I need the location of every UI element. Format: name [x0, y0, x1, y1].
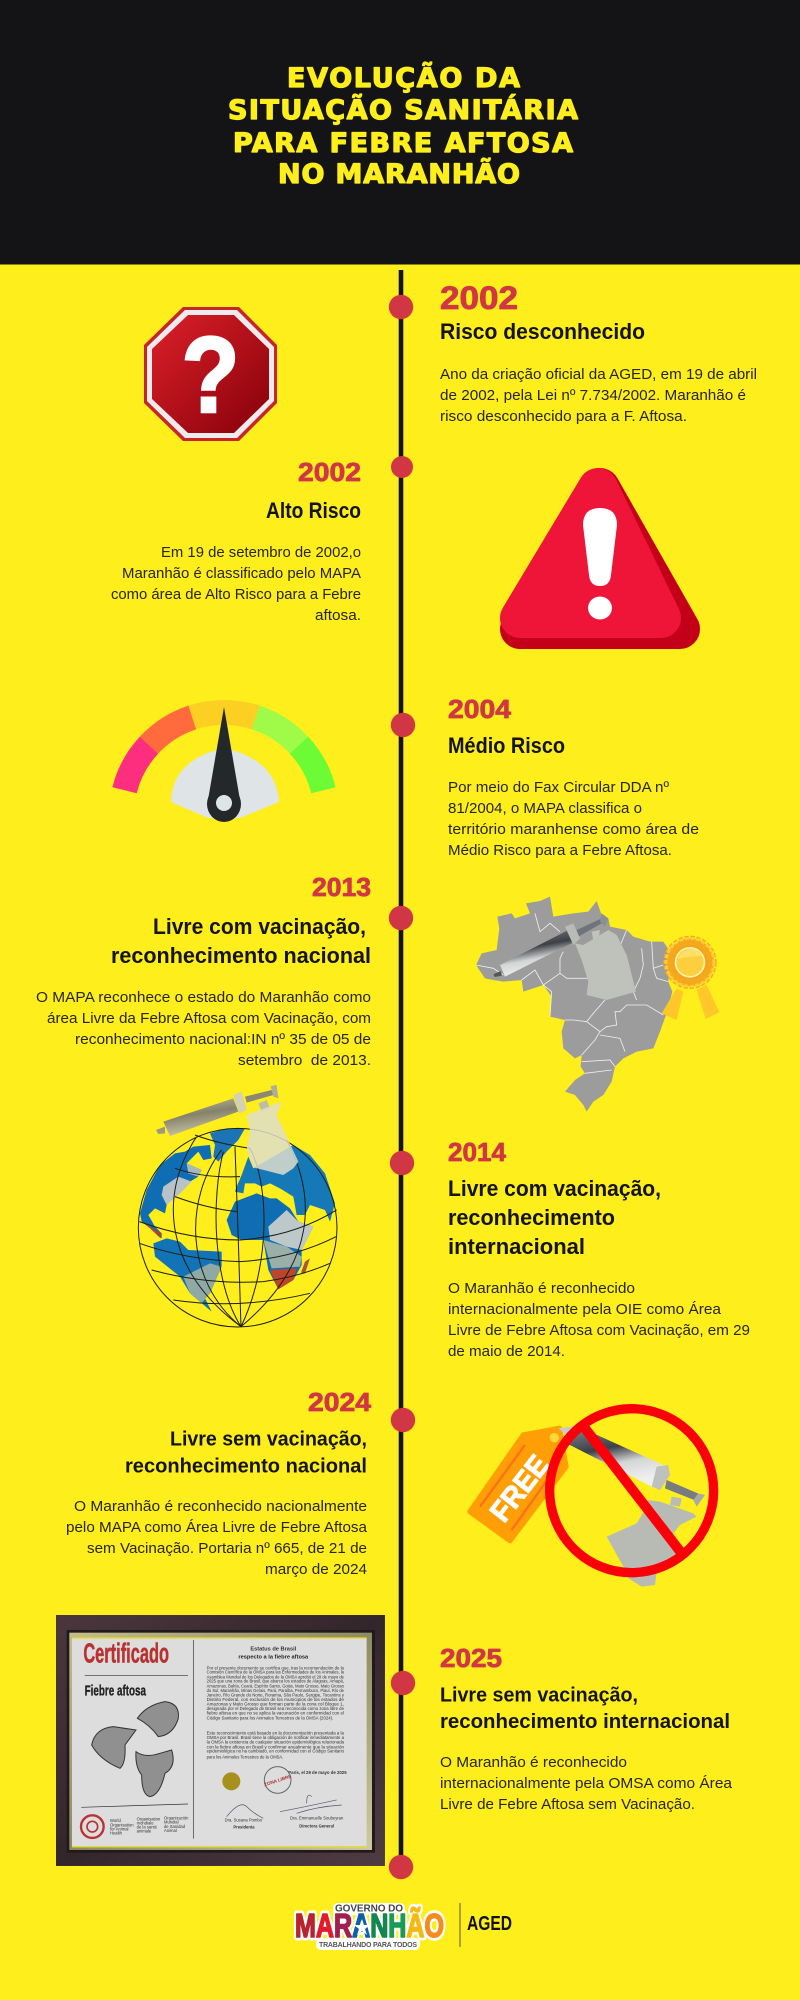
logo: Governo do Maranhão: MARANHÃO — [295, 1907, 444, 1944]
certificate body text: epidemiológica no ha cambiado, en conformidad con el Código Sanitario — [207, 1749, 345, 1754]
syringe — [156, 1085, 298, 1175]
heading: Livre sem vacinação, — [440, 1684, 638, 1706]
certificate body text: OMSA por Brasil. Brasil tiene la obligación de notificar inmediatamente a — [207, 1735, 345, 1740]
certificate body text: París, el 29 de mayo de 2025 — [288, 1770, 347, 1775]
body text: como área de Alto Risco para a Febre — [111, 586, 361, 603]
entry: 2004 medio risco — [448, 694, 699, 859]
certificate image: World — [110, 1818, 121, 1823]
heading: Médio Risco — [448, 733, 565, 758]
certificate image: animale — [137, 1829, 152, 1834]
heading — [125, 1428, 367, 1478]
certificate body text: do Sul, Maranhão, Minas Gerais, Pará, Paraíba, Pernambuco, Piauí, Río de — [207, 1688, 345, 1693]
body text: território maranhense como área de — [448, 821, 699, 838]
certificate body text: designada por el Delegado de Brasil sea reconocida como zona libre de — [207, 1706, 345, 1711]
title: NO MARANHÃO — [278, 158, 520, 190]
certificate image: Presidenta — [233, 1825, 255, 1830]
year: 2025 — [440, 1643, 502, 1673]
certificate image: Organización — [164, 1815, 189, 1820]
body text — [111, 544, 361, 624]
heading: Livre sem vacinação, — [170, 1428, 367, 1450]
icon: stop sign with question mark: ? — [182, 314, 240, 435]
body text: pelo MAPA como Área Livre de Febre Aftosa — [66, 1519, 368, 1536]
certificate body text: Por el presente documento se certifica que, tras la recomendación de la — [207, 1665, 345, 1670]
certificate image: respecto a la fiebre aftosa — [238, 1655, 309, 1661]
syringe — [493, 913, 636, 1000]
certificate image: Mundial — [164, 1820, 179, 1825]
heading — [111, 914, 371, 968]
certificate image: Dra. Susana Pombo — [225, 1817, 263, 1822]
certificate body text: Comisión Científica de la OMSA para las Enfermedades de los Animales, la — [207, 1670, 345, 1675]
body text — [448, 779, 699, 859]
body text: Maranhão é classificado pelo MAPA — [122, 565, 361, 582]
body text: Por meio do Fax Circular DDA nº — [448, 779, 670, 796]
certificate image: Health — [110, 1830, 123, 1835]
certificate image: Fiebre aftosa — [85, 1683, 146, 1700]
entry: 2013 reconhecimento nacional — [36, 872, 371, 1069]
body text: de 2002, pela Lei nº 7.734/2002. Maranhão é — [440, 387, 746, 404]
certificate image: ZONA LIBRE — [264, 1774, 292, 1787]
certificate body text: Amazonas, Bahía, Ceará, Espírito Santo, Goiás, Mato Grosso, Mato Grosso — [207, 1683, 345, 1688]
heading: Livre com vacinação, — [448, 1176, 661, 1201]
heading: Alto Risco — [266, 498, 361, 523]
body text: de maio de 2014. — [448, 1343, 565, 1360]
title: SITUAÇÃO SANITÁRIA — [228, 94, 578, 126]
certificate image: Directora General — [299, 1823, 334, 1828]
logo: AGED: AGED — [467, 1913, 512, 1935]
certificate body text: fiebre aftosa en que no se aplica la vacunación en conformidad con el — [207, 1711, 344, 1716]
body text: sem Vacinação. Portaria nº 665, de 21 de — [87, 1540, 367, 1557]
certificate image: mondiale — [137, 1821, 154, 1826]
entry: 2002 risco desconhecido — [440, 280, 757, 425]
logo: Governo do Maranhão: TRABALHANDO PARA TODOS — [319, 1942, 417, 1949]
timeline markers — [389, 295, 415, 1879]
icon: free tag — [470, 1428, 566, 1541]
body text: Ano da criação oficial da AGED, em 19 de abril — [440, 366, 757, 383]
logo: Governo do Maranhão: MARANHÃO — [295, 1907, 444, 1944]
certificate body text: Código Sanitario para los Animales Terrestres de la OMSA (2024). — [207, 1715, 333, 1720]
icon: free tag: FREE — [484, 1449, 556, 1528]
certificate image: de Sanidad — [164, 1824, 186, 1829]
certificate body text: Asamblea Mundial de los Delegados de la OMSA aprobó el 29 de mayo de — [207, 1674, 345, 1679]
body text: Em 19 de setembro de 2002,o — [161, 544, 361, 561]
heading — [440, 1684, 730, 1733]
certificate image: Certificado — [83, 1638, 169, 1669]
continents — [140, 1128, 335, 1312]
icon: risk gauge — [112, 700, 336, 822]
certificate body text: la OMSA la existencia de cualquier situación epidemiológica relacionada — [207, 1740, 345, 1745]
body text: O MAPA reconhece o estado do Maranhão como — [36, 989, 371, 1006]
logo divider — [459, 1903, 461, 1947]
heading: reconhecimento nacional — [111, 943, 371, 968]
heading: Livre com vacinação, — [153, 914, 366, 939]
icon: crossed out syringe — [550, 1409, 714, 1587]
certificate body text: Este reconocimiento está basado en la documentación presentada a la — [207, 1730, 345, 1735]
icon: stop sign with question mark — [144, 307, 277, 441]
year: 2004 — [448, 694, 512, 724]
title: EVOLUÇÃO DA — [287, 62, 520, 94]
body text: O Maranhão é reconhecido — [440, 1754, 627, 1771]
body text — [66, 1498, 368, 1578]
body text — [36, 989, 371, 1069]
heading: reconhecimento — [448, 1205, 615, 1230]
icon: Brazil map with syringe — [476, 897, 672, 1112]
body text: risco desconhecido para a F. Aftosa. — [440, 408, 687, 425]
body text: setembro de 2013. — [238, 1052, 371, 1069]
icon: gold medal — [662, 938, 719, 1020]
entry: 2002 alto risco — [111, 457, 361, 624]
certificate image: Estatus de Brasil — [250, 1647, 297, 1653]
body text — [440, 1754, 733, 1813]
icon: warning triangle — [520, 488, 680, 629]
certificate body text: Distrito Federal, con exclusión de los municipios de los estados de — [207, 1697, 345, 1702]
certificate image — [56, 1615, 385, 1866]
certificate body text: Amazonas y Mato Grosso que forman parte de la zona col Bloque 1, — [207, 1702, 344, 1707]
body text: março de 2024 — [265, 1561, 367, 1578]
body text: internacionalmente pela OMSA como Área — [440, 1775, 733, 1792]
body text: O Maranhão é reconhecido — [448, 1280, 635, 1297]
year: 2014 — [448, 1137, 507, 1167]
title — [228, 62, 578, 190]
body text: Livre de Febre Aftosa sem Vacinação. — [440, 1796, 695, 1813]
certificate body text: con la fiebre aftosa en Brasil y confirmar anualmente que la situación — [207, 1744, 345, 1749]
grid — [138, 1128, 337, 1327]
certificate image: for Animal — [110, 1826, 129, 1831]
certificate image: Animal — [164, 1828, 177, 1833]
timeline axis — [399, 270, 403, 1867]
year: 2013 — [312, 872, 371, 902]
certificate image: Organisation — [137, 1816, 161, 1821]
entry: 2025 sem vacinacao internacional — [440, 1643, 733, 1813]
body text: internacionalmente pela OIE como Área — [448, 1301, 722, 1318]
animal sketches — [92, 1702, 178, 1797]
body text — [440, 366, 757, 425]
body text: 81/2004, o MAPA classifica o — [448, 800, 642, 817]
certificate body text: para los Animales Terrestres de la OMSA. — [207, 1754, 283, 1759]
title: PARA FEBRE AFTOSA — [233, 128, 573, 159]
certificate body text — [207, 1665, 347, 1775]
certificate image: Organisation — [110, 1822, 134, 1827]
body text: área Livre da Febre Aftosa com Vacinação, com — [47, 1010, 371, 1027]
year: 2024 — [308, 1387, 372, 1417]
certificate image: Dra. Emmanuelle Soubeyran — [290, 1815, 344, 1820]
body text: reconhecimento nacional:IN nº 35 de 05 de — [75, 1031, 371, 1048]
body text — [448, 1280, 750, 1360]
syringe — [558, 1425, 705, 1587]
heading: Risco desconhecido — [440, 319, 645, 344]
certificate body text: Janeiro, Río Grande do Norte, Roraima, São Paulo, Sergipe, Tocantins y — [207, 1693, 345, 1698]
entry: 2024 sem vacinacao nacional — [66, 1387, 372, 1578]
entry: 2014 reconhecimento internacional — [448, 1137, 750, 1360]
body text: O Maranhão é reconhecido nacionalmente — [74, 1498, 367, 1515]
heading — [448, 1176, 661, 1259]
year: 2002 — [298, 457, 361, 487]
heading: reconhecimento nacional — [125, 1456, 367, 1478]
heading: reconhecimento internacional — [440, 1711, 730, 1733]
logo: Governo do Maranhão: GOVERNO DO — [335, 1904, 403, 1914]
year: 2002 — [440, 280, 518, 316]
certificate body text: 2025 que una zona de Brasil, que abarca los estados de Alagoas, Amapá, — [207, 1679, 344, 1684]
header band — [0, 0, 800, 264]
body text: aftosa. — [315, 607, 361, 624]
certificate image: de la santé — [137, 1825, 158, 1830]
body text: Livre de Febre Aftosa com Vacinação, em 29 — [448, 1322, 750, 1339]
icon: globe with syringe — [138, 1085, 337, 1327]
body text: Médio Risco para a Febre Aftosa. — [448, 842, 672, 859]
heading: internacional — [448, 1234, 585, 1259]
